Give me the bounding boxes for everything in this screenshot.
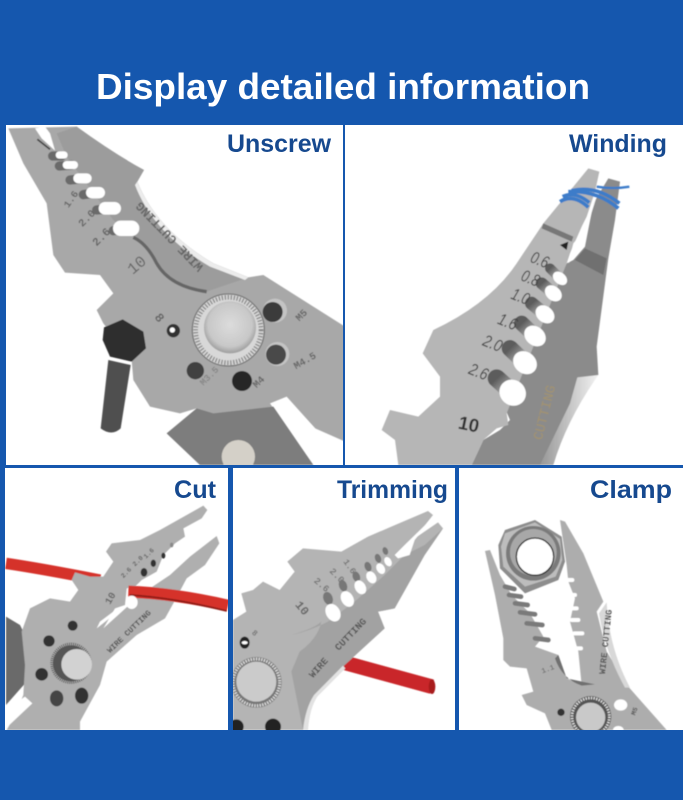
heading: Winding: Winding: [569, 130, 667, 158]
tool photo: trimming red wire: 8: [249, 629, 259, 639]
panel: trimming: [229, 468, 455, 735]
tool photo: pliers with bolt: 10: [124, 253, 151, 279]
tool photo: pliers with bolt: M4: [252, 375, 268, 391]
tool photo: pliers with bolt: 1.6: [63, 190, 82, 211]
tool photo: trimming red wire: CUTTING: [333, 616, 369, 653]
tool photo: cutting red wire: [5, 505, 228, 730]
tool photo: jaws with blue wire: [381, 168, 630, 465]
tool photo: pliers with bolt: M5: [294, 308, 311, 324]
tool photo: cutting red wire: 1.6: [142, 546, 156, 560]
tool photo: clamping a nut: [484, 520, 667, 730]
tool photo: pliers with bolt: 8: [151, 310, 167, 326]
tool photo: trimming red wire: [233, 510, 444, 730]
tool photo: clamping a nut: WIRE CUTTING: [598, 609, 615, 675]
heading: Unscrew: Unscrew: [227, 130, 332, 158]
heading: Clamp: Clamp: [590, 476, 672, 504]
tool photo: trimming red wire: 2.0: [327, 566, 347, 586]
title: Display detailed information: [96, 66, 590, 107]
tool photo: jaws with blue wire: 0.6: [528, 248, 552, 273]
tool photo: trimming red wire: WIRE: [307, 656, 331, 680]
tool photo: pliers with bolt: M4.5: [292, 351, 319, 373]
tool photo: jaws with blue wire: 2.0: [479, 331, 505, 356]
tool photo: trimming red wire: 10: [292, 599, 312, 619]
tool photo: cutting red wire: 10: [104, 591, 119, 607]
heading: Trimming: Trimming: [337, 476, 448, 504]
tool photo: cutting red wire: 2.0: [131, 554, 145, 568]
tool photo: jaws with blue wire: 1.6: [495, 310, 520, 335]
tool photo: trimming red wire: 1.6: [341, 558, 358, 576]
tool photo: clamping a nut: 1.1: [541, 664, 556, 676]
heading: Cut: Cut: [174, 476, 217, 504]
tool photo: jaws with blue wire: 2.6: [465, 360, 491, 385]
tool photo: jaws with blue wire: 1.0: [508, 285, 533, 309]
panel: cut: [5, 468, 228, 730]
panel: clamp: [459, 468, 683, 737]
tool photo: pliers with bolt: 2.6: [91, 226, 114, 249]
tool photo: pliers with bolt: WIRE CUTTING: [133, 198, 207, 274]
tool photo: trimming red wire: 2.6: [311, 576, 332, 595]
tool photo: jaws with blue wire: 0.8: [518, 267, 543, 291]
tool photo: pliers with bolt: [8, 126, 343, 465]
tool photo: pliers with bolt: M3.5: [198, 364, 222, 388]
tool photo: pliers with bolt: 2.0: [77, 208, 99, 230]
tool photo: cutting red wire: 2.6: [119, 566, 133, 580]
tool photo: jaws with blue wire: CUTTING: [532, 384, 560, 442]
tool photo: clamping a nut: M5: [629, 706, 640, 716]
tool photo: jaws with blue wire: 10: [457, 412, 481, 437]
tool photo: cutting red wire: WIRE CUTTING: [106, 609, 154, 655]
panel: winding: [345, 125, 683, 465]
panel: unscrew: [6, 125, 345, 473]
